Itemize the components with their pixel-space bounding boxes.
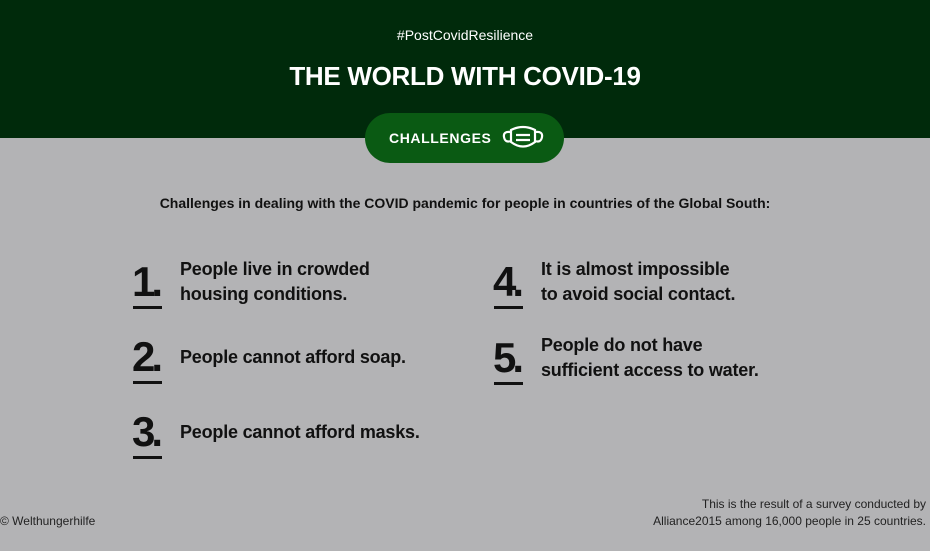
item 2 — [132, 333, 406, 384]
source note: This is the result of a survey conducted by — [702, 497, 926, 511]
item 5: sufficient access to water. — [541, 360, 759, 380]
pill: challenges: CHALLENGES — [389, 130, 491, 146]
title: THE WORLD WITH COVID-19 — [289, 61, 641, 91]
pill: challenges — [365, 113, 564, 163]
source note: Alliance2015 among 16,000 people in 25 countries. — [653, 514, 926, 528]
header band — [0, 0, 930, 138]
item 5 — [493, 334, 759, 385]
item 1: housing conditions. — [180, 284, 347, 304]
item 3: 3. — [132, 408, 159, 455]
item 3 — [132, 408, 420, 459]
item 1 — [132, 258, 370, 309]
icon: mask — [502, 126, 544, 148]
item 4: It is almost impossible — [541, 259, 729, 279]
item 5: 5. — [493, 334, 520, 381]
item 4 — [493, 258, 735, 309]
item 4: to avoid social contact. — [541, 284, 735, 304]
subtitle: Challenges in dealing with the COVID pandemic for people in countries of the Global South: — [160, 195, 770, 211]
item 2: 2. — [132, 333, 159, 380]
item 5: People do not have — [541, 335, 702, 355]
item 3: People cannot afford masks. — [180, 422, 420, 442]
source note — [653, 497, 926, 528]
hashtag: #PostCovidResilience — [397, 27, 533, 43]
item 2: People cannot afford soap. — [180, 346, 406, 366]
item 1: People live in crowded — [180, 259, 370, 279]
item 1: 1. — [132, 258, 159, 305]
item 4: 4. — [493, 258, 520, 305]
copyright: © Welthungerhilfe — [0, 514, 95, 528]
